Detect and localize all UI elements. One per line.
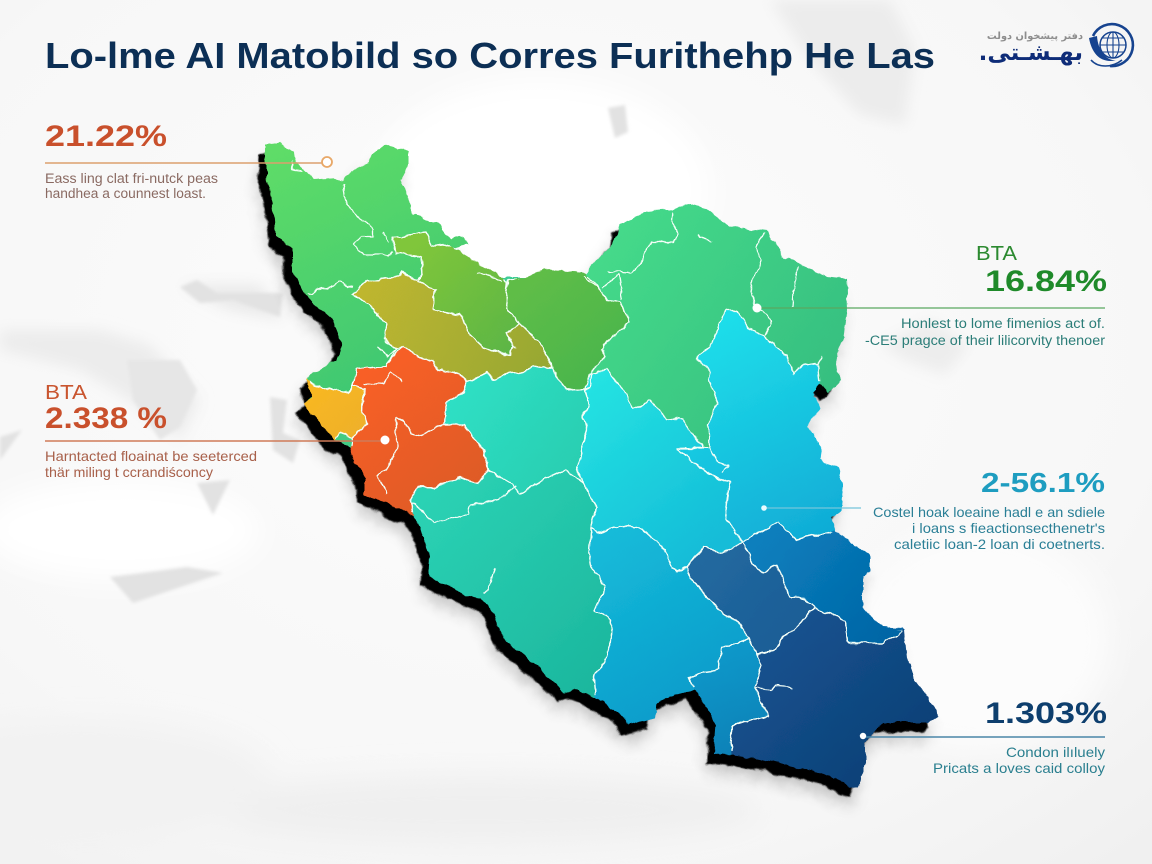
region: north-east green: [587, 204, 847, 448]
description: handhea a counnest loast.: [45, 186, 206, 201]
description: caletiic loan-2 loan di coetnerts.: [894, 536, 1105, 552]
stat value: 16.84%: [985, 265, 1107, 298]
map soft shadow: [260, 161, 930, 806]
region: central teal: [445, 367, 590, 493]
region: northern lime: [393, 233, 520, 357]
icon: globe emblem: [1089, 24, 1133, 66]
description: -CE5 pragce of their lilicorvity thenoer: [865, 333, 1106, 348]
region: olive: [352, 272, 552, 382]
logo: [979, 24, 1133, 66]
region: southern coast blue: [689, 637, 768, 755]
callout: bottom right: [860, 697, 1107, 776]
logo: Persian wordmark: دفتر پیشخوان دولت: [987, 31, 1083, 42]
region: north-west green: [267, 143, 468, 393]
region: south-east blue: [743, 523, 904, 643]
description: Honlest to lome fimenios act of.: [901, 316, 1105, 331]
title: Lo-lme AI Matobild so Corres Furithehp He Las: [45, 35, 935, 76]
description: thär miling t ccrandiśconcy: [45, 464, 213, 480]
region: orange: [350, 347, 488, 515]
label: BTA: [976, 243, 1018, 265]
callout: left BTA: [45, 382, 390, 480]
region: navy south-east: [730, 606, 937, 788]
callout: right cyan: [761, 467, 1105, 552]
leader line and marker: [45, 436, 390, 444]
leader line and marker: [860, 733, 1105, 739]
leader line and marker: [45, 157, 332, 167]
description: Pricats a loves caid colloy: [933, 760, 1105, 776]
region: south-west teal: [410, 470, 612, 697]
region: mid blue: [687, 542, 816, 655]
leader line and marker: [752, 304, 1105, 312]
map hard shadow: [259, 153, 929, 798]
callout: top-left: [45, 120, 332, 201]
stat value: 1.303%: [985, 697, 1107, 730]
region: eastern cyan: [677, 310, 843, 542]
stat value: 2.338 %: [45, 402, 167, 435]
callout: right BTA: [752, 243, 1107, 348]
map base fill: [267, 143, 937, 788]
region: central cyan: [577, 370, 743, 572]
description: i loans s fieactionsecthenetr's: [912, 520, 1105, 536]
region: yellow: [303, 380, 368, 440]
stat value: 2-56.1%: [981, 467, 1105, 498]
region: southern cyan: [589, 525, 748, 725]
description: Harntacted floainat be seeterced: [45, 448, 257, 464]
label: BTA: [45, 382, 88, 404]
region borders: [290, 160, 903, 751]
map of regions: [259, 143, 937, 806]
description: Eass ling clat fri-nutck peas: [45, 171, 218, 186]
description: Condon ilıluely: [1006, 744, 1105, 760]
stat value: 21.22%: [45, 120, 167, 153]
description: Costel hoak loeaine hadl e an sdiele: [873, 504, 1105, 520]
logo: Persian wordmark: بهـشـتی.: [979, 40, 1083, 66]
leader line and marker: [761, 505, 861, 511]
region: east-central green: [505, 270, 630, 390]
